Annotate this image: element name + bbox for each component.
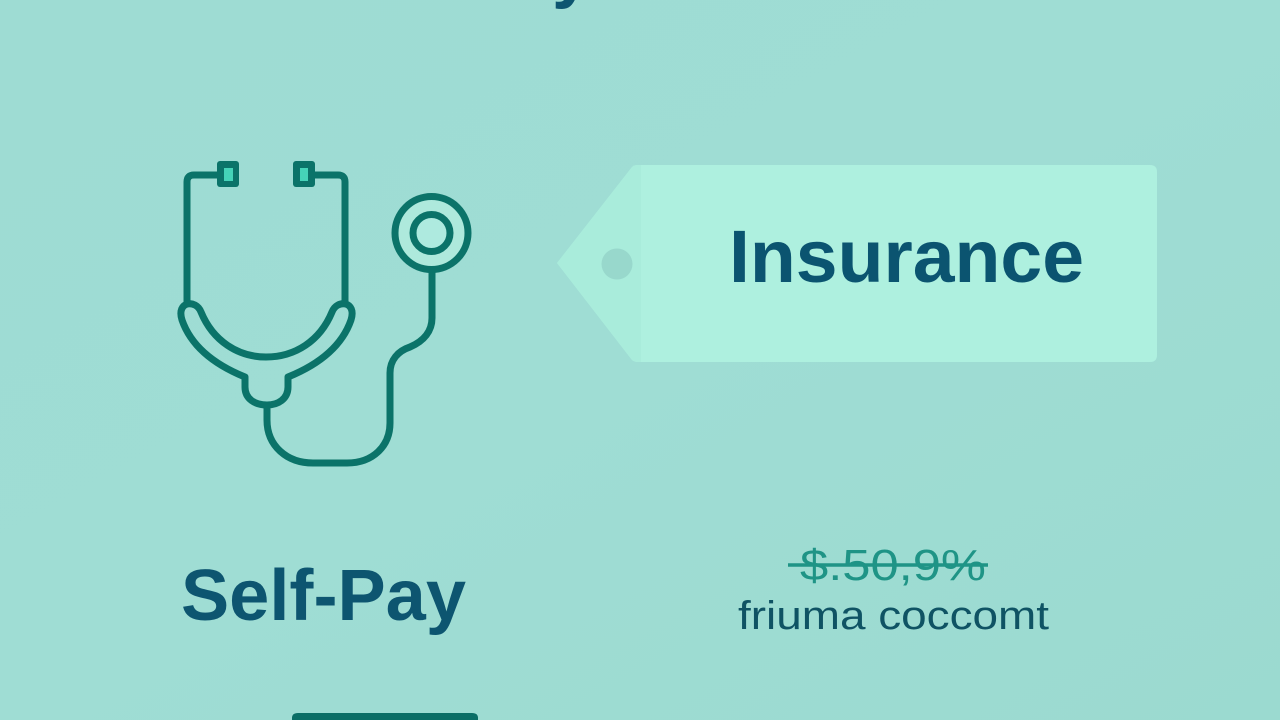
bottom button — [292, 713, 478, 720]
headset yoke — [181, 304, 352, 405]
tag hole — [602, 248, 632, 280]
right tube — [314, 175, 345, 303]
tubing — [267, 270, 432, 463]
left earpiece — [217, 161, 239, 187]
price with strikethrough: $.50,9% — [800, 541, 986, 590]
chest piece — [395, 196, 468, 270]
heading: self-pay: Self-Pay — [181, 556, 466, 636]
panel: insurance tag — [557, 165, 1157, 362]
left tube — [187, 175, 218, 303]
caption: friuma coccomt — [738, 594, 1049, 638]
icon: stethoscope — [181, 161, 468, 463]
heading: insurance: Insurance — [729, 215, 1084, 298]
right earpiece — [293, 161, 315, 187]
